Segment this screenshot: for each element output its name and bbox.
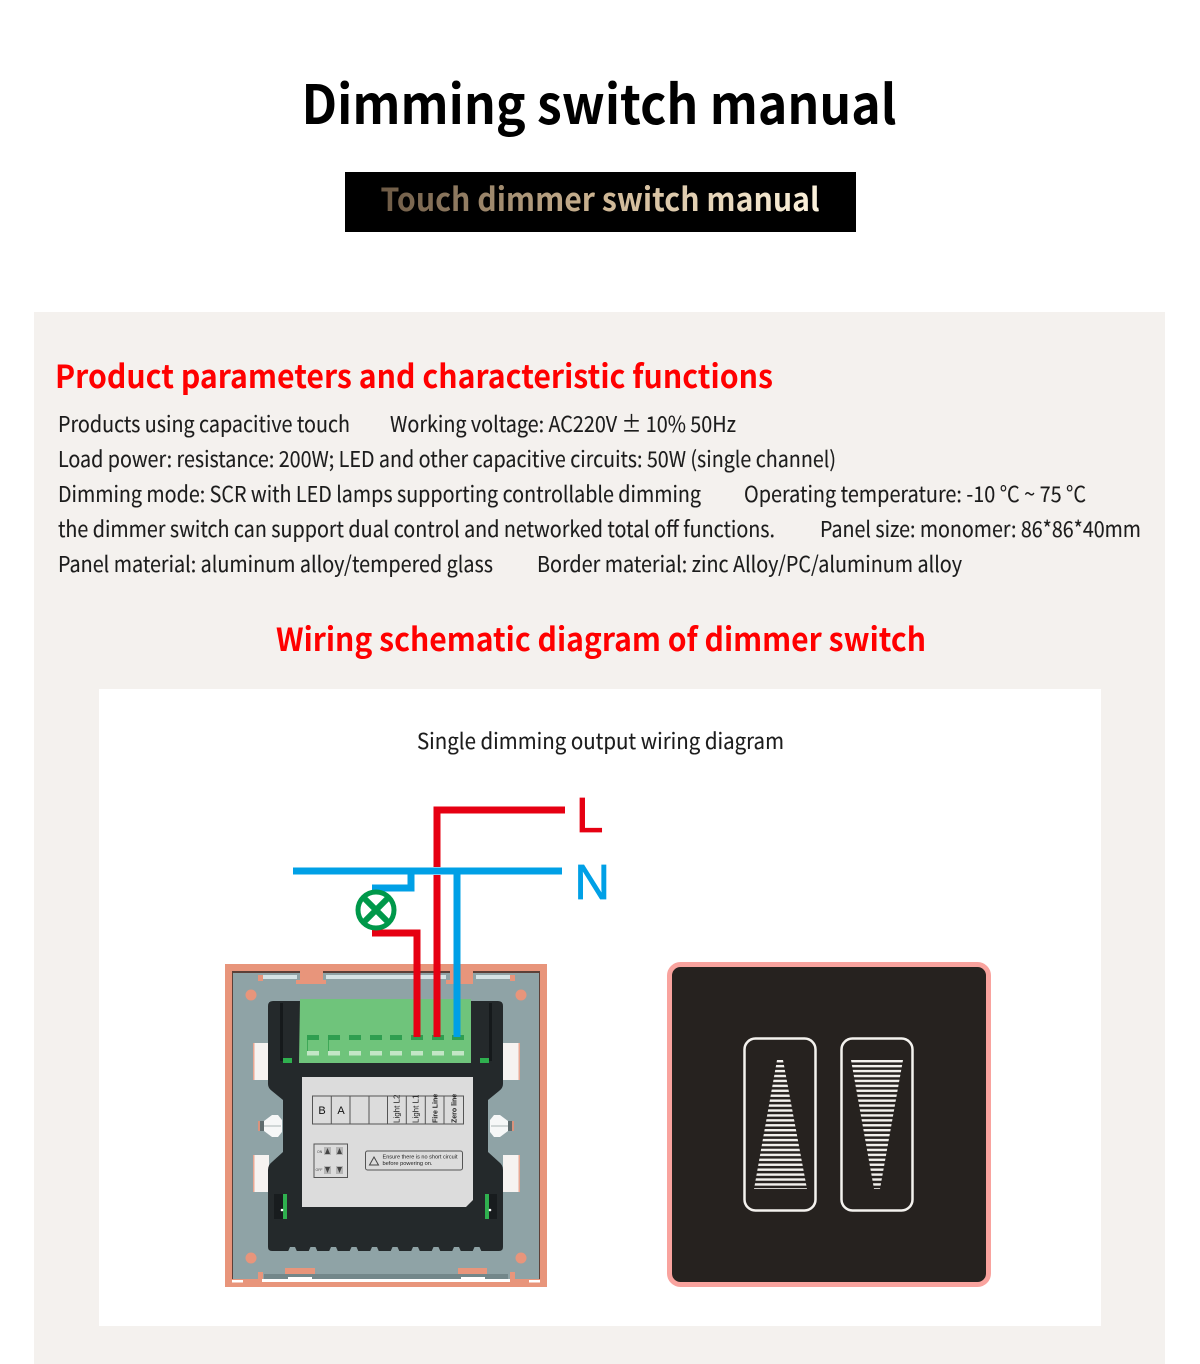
wiring: live line <box>372 810 565 1037</box>
green terminal block <box>283 999 489 1063</box>
label: N: N <box>574 856 610 910</box>
screw slots <box>258 1115 514 1137</box>
subtitle banner: Touch dimmer switch manual <box>380 175 820 221</box>
text block: product parameters: Panel size: monomer: 86*86*40mm <box>820 512 1141 544</box>
body bottom notches <box>288 1247 482 1252</box>
side mounting tabs <box>253 1043 520 1192</box>
text block: product parameters: Panel material: aluminum alloy/tempered glass <box>58 547 493 579</box>
diagram caption: Single dimming output wiring diagram <box>417 724 784 756</box>
text block: product parameters: Products using capacitive touch <box>58 407 350 439</box>
heading: wiring schematic: Wiring schematic diagram of dimmer switch <box>276 615 926 661</box>
title: Dimming switch manual <box>302 61 896 140</box>
switch back view <box>225 964 547 1287</box>
terminal table: Fire Line <box>432 1094 440 1123</box>
text block: product parameters: Working voltage: AC220V ± 10% 50Hz <box>390 407 736 439</box>
subtitle banner <box>345 172 856 232</box>
text block: product parameters: Border material: zinc Alloy/PC/aluminum alloy <box>537 547 962 579</box>
warning note: Ensure there is no short circuit <box>382 1154 458 1160</box>
panel: product manual <box>34 312 1165 1364</box>
on/off key legend: ON <box>317 1150 323 1154</box>
terminal table <box>312 1094 464 1124</box>
text block: product parameters <box>58 407 1141 579</box>
dim-down button <box>842 1038 912 1210</box>
warning note <box>366 1151 462 1170</box>
wiring: neutral line <box>293 871 562 1037</box>
text block: product parameters: Dimming mode: SCR with LED lamps supporting controllable dimming <box>58 477 702 509</box>
icon: lamp <box>358 892 394 928</box>
switch front view <box>670 964 988 1284</box>
heading: product parameters: Product parameters and characteristic functions <box>55 352 773 398</box>
warning note: before powering on. <box>382 1161 432 1167</box>
terminal table: Light L1 <box>412 1094 420 1123</box>
panel: wiring diagram <box>99 689 1101 1326</box>
green side clips <box>274 1194 497 1219</box>
label: L: L <box>576 789 603 843</box>
terminal table: Zero line <box>452 1094 458 1123</box>
text block: product parameters: the dimmer switch can support dual control and networked total off functions. <box>58 512 775 544</box>
switch body <box>268 1001 503 1251</box>
terminal table: Light L2 <box>392 1094 402 1123</box>
text block: product parameters: Load power: resistance: 200W; LED and other capacitive circuits: 50W (single channel) <box>58 442 836 474</box>
on/off key legend: OFF <box>316 1168 322 1172</box>
terminal label <box>302 1077 473 1207</box>
on/off key legend <box>314 1144 348 1178</box>
terminal table: A <box>337 1105 345 1117</box>
text block: product parameters: Operating temperature: -10 °C ~ 75 °C <box>744 477 1086 509</box>
dim-up button <box>744 1038 816 1210</box>
terminal table: B <box>318 1105 326 1117</box>
